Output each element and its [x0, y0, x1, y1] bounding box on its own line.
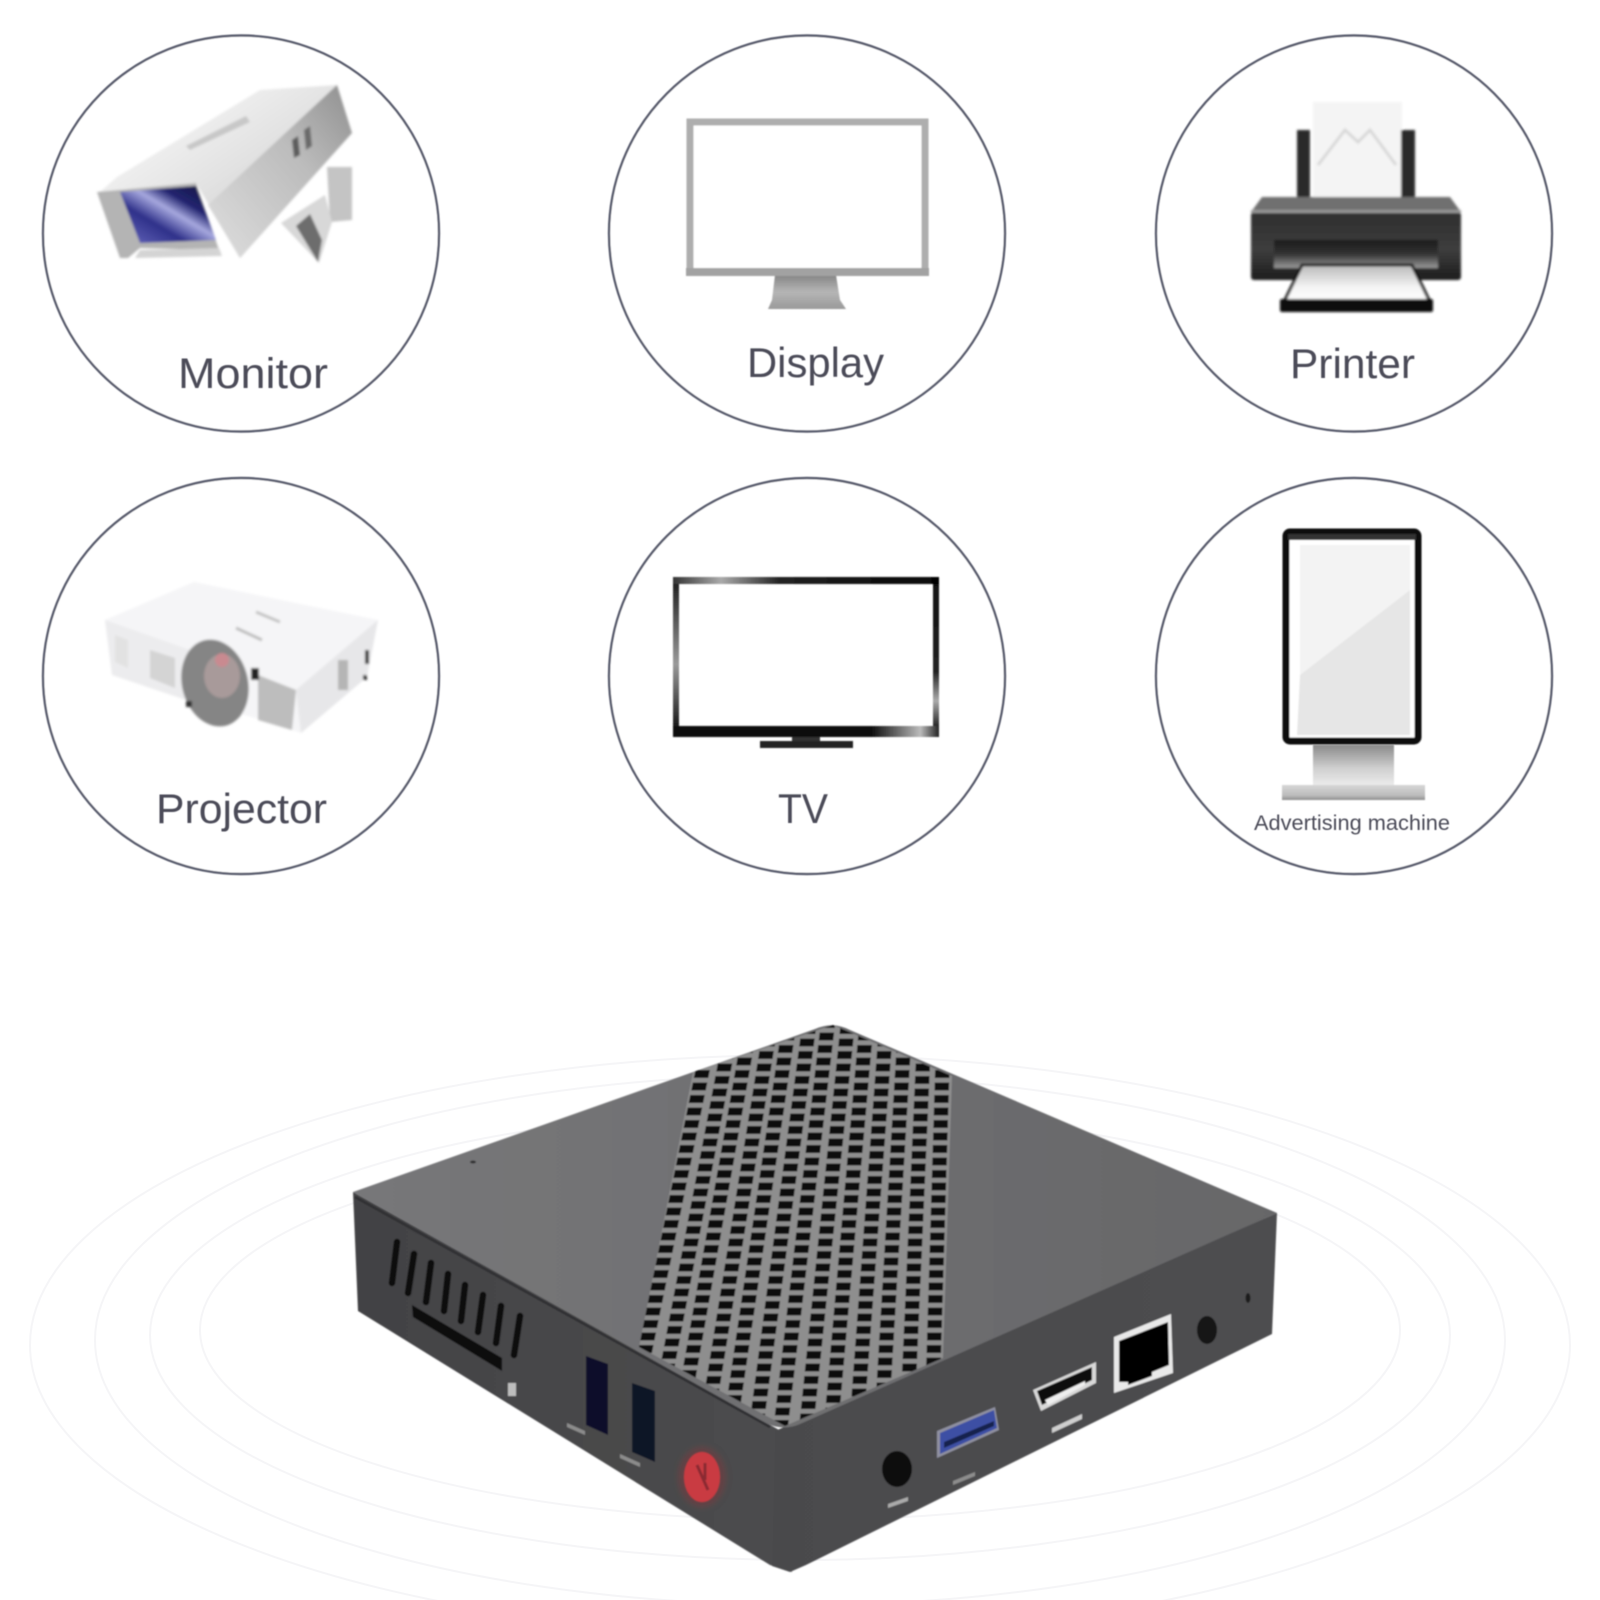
panel: Advertising machine [1156, 478, 1552, 874]
label: Projector: Projector [156, 785, 327, 832]
vent grille [622, 1020, 952, 1434]
USB port labels [567, 1423, 640, 1467]
mini PC product [353, 1020, 1277, 1572]
top edge shadow [355, 1197, 770, 1427]
icon: desktop display [686, 122, 929, 309]
panel: Display [609, 36, 1005, 432]
circle outline [609, 36, 1005, 432]
icon: projector [105, 582, 378, 734]
icon: security camera style monitor [97, 85, 352, 263]
HDMI port [1033, 1362, 1096, 1411]
icon: advertising kiosk [1282, 532, 1425, 800]
audio jack [1197, 1316, 1217, 1344]
top face LED dot [470, 1160, 476, 1164]
power button glow [678, 1447, 726, 1507]
power symbol [697, 1463, 708, 1490]
background ripple rings [30, 1055, 1570, 1600]
icon: printer [1251, 102, 1461, 312]
USB port 2 [632, 1383, 655, 1462]
right side face [772, 1213, 1277, 1572]
USB 3.0 port [937, 1407, 999, 1458]
indicator dot [1246, 1293, 1250, 1303]
panel: Printer [1156, 36, 1552, 432]
RJ45 port [1114, 1314, 1173, 1393]
label: Monitor: Monitor [178, 350, 328, 398]
label: Printer: Printer [1290, 340, 1415, 387]
USB 3.0 label [953, 1472, 975, 1485]
icon: flat screen TV [673, 577, 939, 748]
label: Advertising machine: Advertising machine [1254, 812, 1450, 835]
label: TV: TV [778, 785, 828, 832]
circle outline [1156, 36, 1552, 432]
circle outline [43, 36, 439, 432]
top face [353, 1025, 1277, 1428]
panel: TV [609, 478, 1005, 874]
DC label [888, 1497, 908, 1508]
circle outline [609, 478, 1005, 874]
panel: Monitor [43, 36, 439, 432]
DC jack [882, 1451, 912, 1487]
panel: Projector [43, 478, 439, 874]
circle outline [1156, 478, 1552, 874]
left side face [353, 1192, 792, 1572]
SD card slot [412, 1305, 502, 1371]
SD label [508, 1383, 516, 1396]
USB port 1 [586, 1356, 608, 1435]
circle outline [43, 478, 439, 874]
label: Display: Display [747, 339, 884, 386]
HDMI label [1052, 1414, 1082, 1433]
cooling slots [392, 1242, 520, 1355]
power button [684, 1452, 720, 1502]
